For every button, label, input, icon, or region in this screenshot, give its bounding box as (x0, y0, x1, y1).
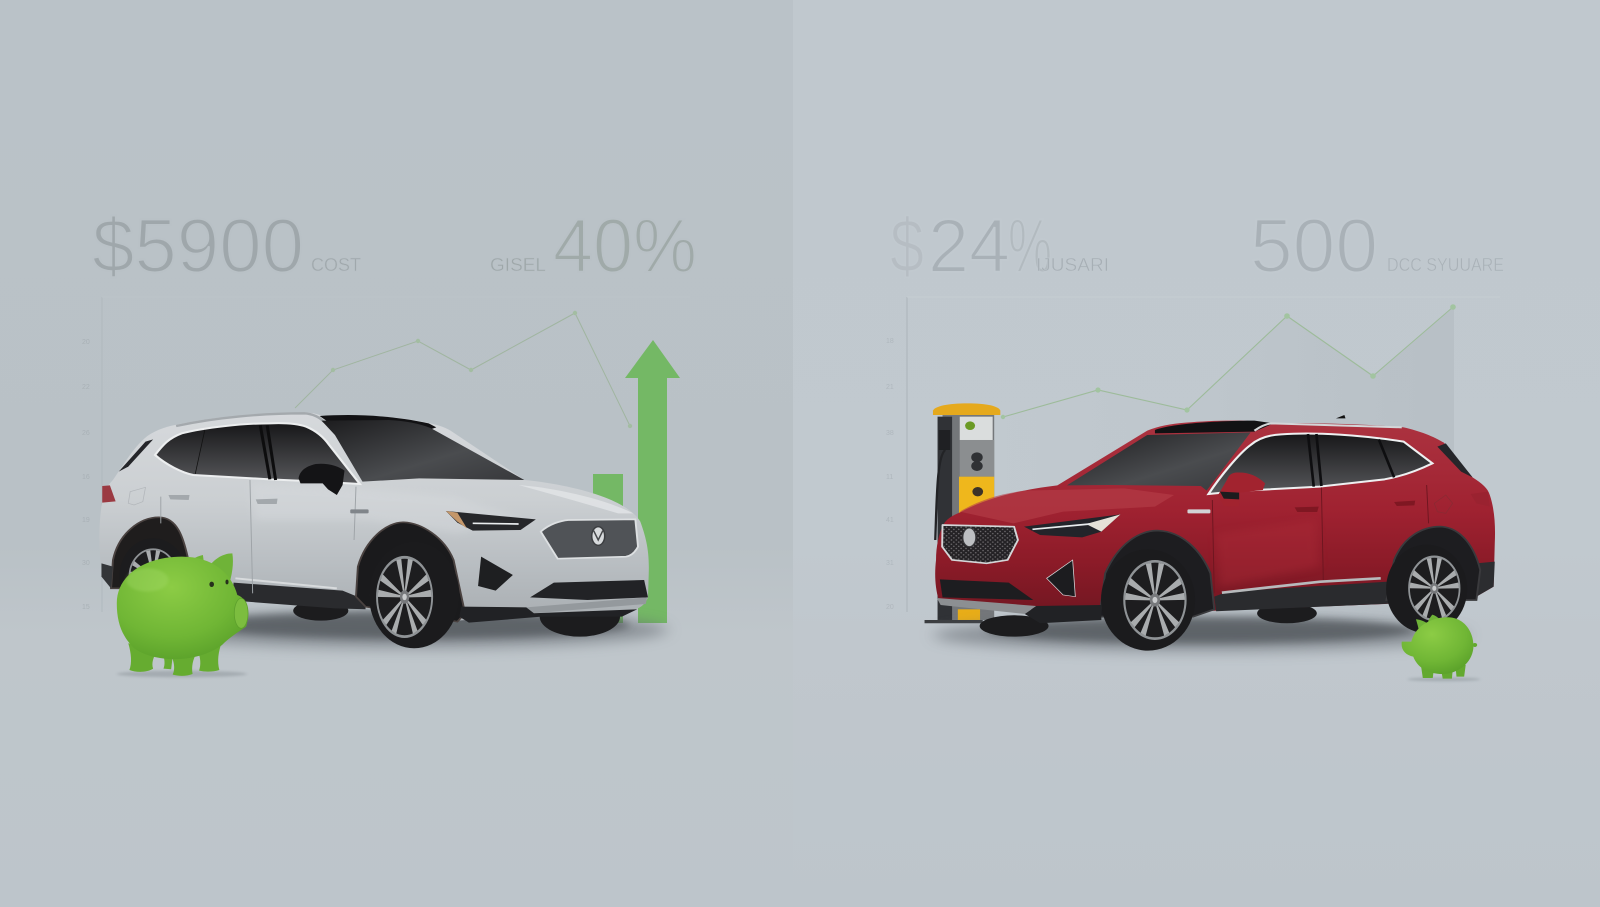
tail light (102, 485, 116, 503)
far wheels (980, 603, 1317, 637)
pig shine (126, 568, 168, 592)
right chart axis labels: 20 (886, 604, 894, 611)
tail light (1471, 492, 1490, 507)
stat: $24% (890, 204, 1109, 289)
roof (1155, 421, 1274, 433)
small pig tail (1473, 643, 1477, 647)
left chart axis labels: 15 (82, 604, 90, 611)
left chart axis labels (82, 339, 90, 611)
right panel background (793, 0, 1600, 907)
charging station (925, 403, 1000, 623)
lower intake (940, 579, 1033, 600)
skid plate (526, 597, 647, 613)
left panel background (0, 0, 793, 907)
right chart line (1001, 304, 1456, 419)
sill (1214, 582, 1396, 611)
left chart axis labels: 22 (82, 384, 90, 391)
small pig shadow (1408, 677, 1480, 681)
stat: $5900 cost: $5900 (92, 204, 304, 289)
stat: 500: 500 (1250, 204, 1378, 289)
badge (592, 527, 605, 545)
red SUV (933, 415, 1495, 652)
small pig body (1402, 617, 1473, 674)
left chart axis labels: 26 (82, 430, 90, 437)
far wheels (293, 597, 620, 637)
right chart axis labels: 18 (886, 338, 894, 345)
front arch and wheel (356, 522, 465, 622)
stat: 500 (1250, 204, 1504, 289)
left chart axis labels: 19 (82, 517, 90, 524)
pig body (117, 557, 248, 659)
small pig ears (1416, 615, 1443, 632)
door seams and handles (1212, 485, 1429, 593)
sill (234, 583, 366, 609)
piggy shadow (117, 671, 247, 677)
small piggy bank (1402, 615, 1480, 681)
right chart area (1003, 307, 1454, 620)
charger socket (971, 452, 983, 471)
mirror (299, 464, 344, 495)
small pig legs (1421, 665, 1466, 679)
stat: 500: DCC SYUUARE (1387, 255, 1504, 275)
charger screen (960, 417, 993, 440)
stat: $24%: IJUSARI (1036, 255, 1109, 275)
left chart axis labels: 16 (82, 474, 90, 481)
right chart axis labels: 11 (886, 474, 893, 481)
windshield (322, 420, 524, 482)
rear arch and wheel (111, 517, 188, 588)
mirror (1218, 472, 1265, 507)
left chart line (295, 311, 632, 428)
pig eye (209, 582, 214, 587)
left chart axis labels: 30 (82, 560, 90, 567)
side window (1209, 434, 1432, 494)
right line chart (886, 297, 1500, 620)
large piggy bank (117, 553, 248, 677)
body (99, 413, 649, 621)
hood highlight (960, 488, 1174, 523)
skid plate (937, 598, 1036, 614)
charger cap (933, 403, 1000, 415)
left stats row (92, 204, 697, 289)
body (935, 421, 1495, 617)
stat: $24%: $ (890, 204, 924, 289)
door seams and handles (161, 480, 356, 593)
front arch and wheel (1099, 531, 1214, 617)
headlight (446, 511, 536, 531)
stat: diesel 40%: GISEL (490, 255, 546, 275)
charger mid panel (960, 440, 994, 477)
green bar (593, 474, 623, 623)
bumper vent (1047, 560, 1075, 597)
rear quarter glass (1437, 443, 1473, 477)
icon: green up arrow (625, 340, 680, 623)
left line chart (82, 297, 690, 612)
right chart axis labels: 38 (886, 430, 894, 437)
bumper vent (478, 557, 513, 591)
rear lower cladding (1476, 562, 1495, 597)
pig snout (234, 598, 248, 628)
pig legs (128, 642, 222, 676)
stat: diesel 40% (490, 204, 697, 289)
windshield (1067, 432, 1251, 491)
right chart axis labels: 41 (886, 517, 894, 524)
body highlight (251, 483, 519, 533)
pig ears (182, 553, 233, 588)
hood highlight (519, 485, 633, 513)
charger base (925, 620, 983, 623)
grille (942, 525, 1018, 563)
silver SUV (99, 413, 668, 648)
stat: $24%: % (1008, 204, 1052, 289)
charger cable (935, 450, 945, 540)
grille (541, 519, 638, 559)
left chart axis labels: 20 (82, 339, 90, 346)
right chart axis labels: 31 (886, 560, 894, 567)
rear arch and wheel (1386, 527, 1480, 600)
charger yellow panel (959, 477, 994, 513)
lower intake (530, 580, 648, 600)
antenna (1336, 415, 1346, 418)
stat: $24%: 24 (928, 204, 1010, 289)
rear quarter glass (119, 439, 153, 472)
side window (155, 423, 360, 484)
headlight (1024, 514, 1120, 537)
roof (320, 415, 436, 431)
charger column (943, 415, 994, 620)
stat: $5900 cost: COST (311, 255, 361, 275)
right chart axis labels (886, 338, 894, 611)
badge (963, 528, 976, 547)
right chart axis labels: 21 (886, 384, 894, 391)
silver SUV shadow (147, 611, 668, 648)
stat: diesel 40%: 40% (553, 204, 697, 289)
red SUV shadow (933, 617, 1469, 652)
right stats row (890, 204, 1504, 289)
